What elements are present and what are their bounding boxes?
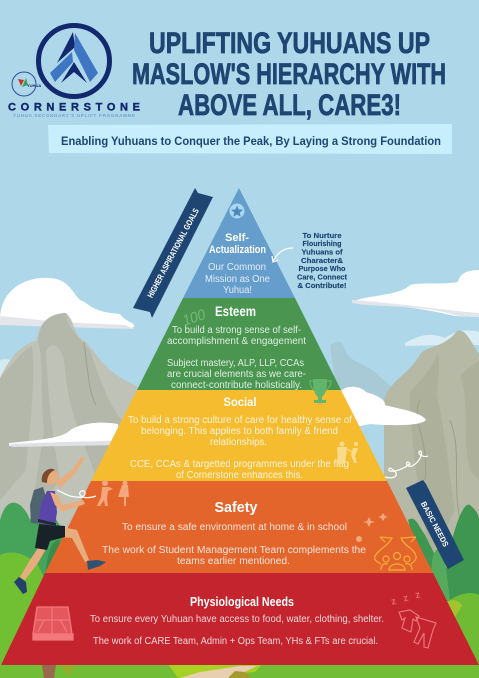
ribbon: higher aspirational goals	[133, 188, 213, 318]
icon: trophy	[310, 379, 331, 403]
icon: star badge	[230, 204, 244, 218]
tier: esteem: Subject mastery, ALP, LLP, CCAs	[167, 358, 304, 369]
tier: safety: To ensure a safe environment at home & in school	[122, 522, 347, 533]
trees: right	[408, 505, 479, 610]
icon: clothes	[399, 610, 436, 648]
callout: nurture note: Character&	[301, 256, 344, 265]
ribbon: higher aspirational goals: HIGHER ASPIRATIONAL GOALS	[145, 206, 201, 299]
cloud: upper left	[0, 278, 135, 329]
backpack	[30, 487, 46, 524]
icon: lunch tray	[33, 607, 73, 640]
tier: social: Social	[224, 395, 256, 409]
icon: friends left	[97, 480, 129, 506]
decorative loop left	[57, 490, 96, 498]
tier: esteem: Esteem	[215, 303, 256, 319]
tier: safety: teams earlier mentioned.	[177, 556, 290, 567]
tier: self-actualization: Yuhua!	[223, 285, 252, 296]
logo wordmark: CORNERSTONE	[8, 102, 140, 114]
tier: self-actualization: Actualization	[209, 244, 266, 256]
tier: self-actualization: Our Common	[208, 262, 266, 273]
cloud: upper right	[352, 270, 479, 317]
cloud: behind pyramid, right	[340, 387, 426, 430]
logo	[8, 26, 140, 118]
torso	[38, 491, 57, 526]
icon: zzz: z z z	[390, 590, 422, 608]
tier: social: belonging. This applies to both family & friend	[141, 426, 338, 437]
tier: esteem	[137, 298, 341, 391]
tier: esteem: accomplishment & engagement	[167, 336, 306, 347]
arrow: note to pyramid	[272, 248, 293, 262]
title: ABOVE ALL, CARE3!	[178, 89, 401, 122]
tier: physiological needs: The work of CARE Team, Admin + Ops Team, YHs & FTs are crucial.	[93, 636, 378, 647]
tier: self-actualization: Mission as One	[205, 274, 270, 285]
logo peak	[50, 32, 98, 83]
logo tagline: YUHUA SECONDARY'S UPLIFT PROGRAMME	[13, 113, 135, 118]
head	[44, 470, 58, 484]
tier: self-actualization	[183, 188, 295, 298]
tier: physiological needs: Physiological Needs	[190, 594, 294, 609]
tier: esteem: To build a strong sense of self-	[172, 325, 301, 336]
front leg	[60, 527, 89, 562]
icon: sparkles	[356, 513, 388, 542]
cloud: behind pyramid, left	[9, 423, 120, 447]
tier: esteem: connect-contribute holistically.	[171, 380, 302, 391]
trees: left	[0, 498, 72, 600]
tier: safety: The work of Student Management Team complements the	[102, 545, 366, 556]
tier: social: CCE, CCAs & targetted programmes under the flag	[130, 459, 349, 470]
callout: nurture note	[297, 231, 347, 290]
icon: 100: 100	[180, 306, 208, 330]
ribbon: basic needs	[406, 480, 464, 569]
callout: nurture note: & Contribute!	[298, 281, 346, 290]
back leg	[20, 548, 46, 580]
subtitle banner: Enabling Yuhuans to Conquer the Peak, By Laying a Strong Foundation	[61, 136, 441, 148]
tier: esteem: are crucial elements as we care-	[167, 369, 306, 380]
pyramid	[1, 188, 479, 665]
callout: nurture note: Yuhuans of	[302, 248, 343, 256]
shorts	[35, 524, 65, 550]
arms	[56, 457, 85, 488]
distant hills	[0, 330, 479, 420]
mountain: right	[384, 331, 479, 590]
tier: physiological needs	[1, 573, 479, 665]
logo ring	[38, 26, 110, 96]
callout: nurture note: Care, Connect	[297, 272, 347, 282]
mountain: left	[0, 313, 150, 560]
ribbon: basic needs: BASIC NEEDS	[419, 500, 451, 549]
school badge: YUHUA	[27, 83, 41, 88]
tier: self-actualization: Self-	[225, 232, 249, 244]
subtitle banner	[48, 124, 452, 154]
tier: safety: Safety	[214, 499, 258, 516]
tier: social: To build a strong culture of care for healthy sense of	[128, 415, 352, 426]
callout: nurture note: Flourishing	[302, 239, 342, 248]
tier: safety	[45, 480, 433, 573]
callout: nurture note: To Nurture	[302, 231, 342, 240]
tier: physiological needs: To ensure every Yuhuan have access to food, water, clothing, shelter.	[90, 614, 384, 625]
tier: social	[91, 379, 387, 481]
illustration: climber	[14, 457, 106, 594]
callout: nurture note: Purpose Who	[298, 264, 346, 273]
icon: friends right	[337, 442, 358, 464]
icon: protecting hands	[375, 537, 416, 570]
tier: social: of Cornerstone enhances this.	[176, 470, 303, 481]
tier: social: relationships.	[210, 437, 267, 448]
grass	[0, 552, 479, 678]
title	[132, 27, 446, 122]
decorative loop right	[385, 451, 428, 478]
